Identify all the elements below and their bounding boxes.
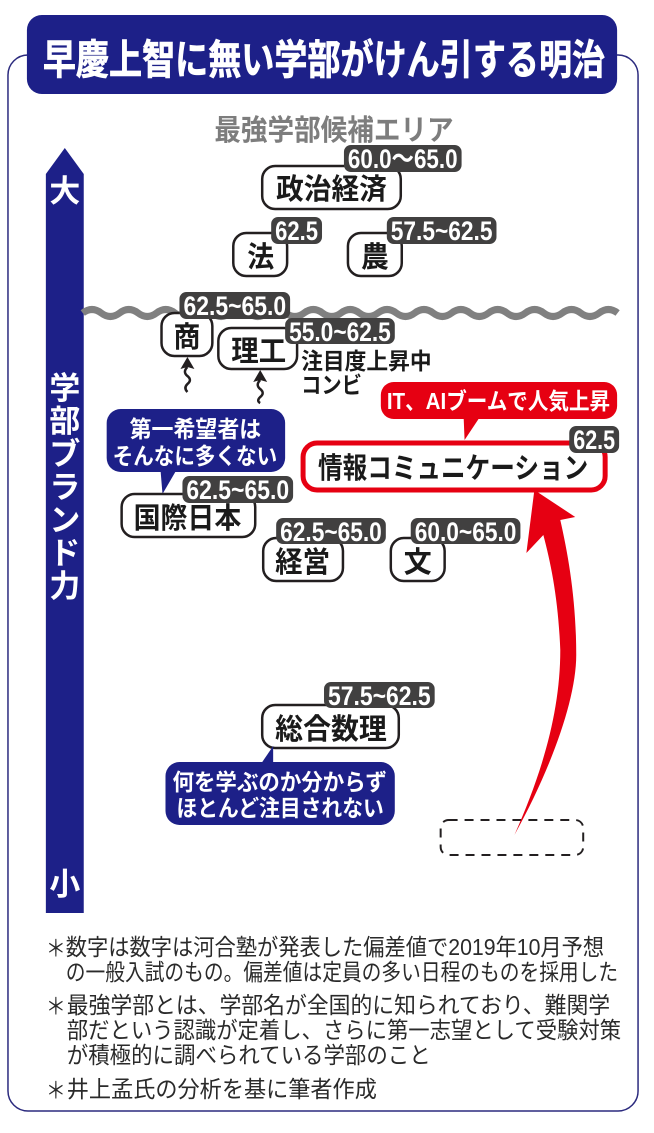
footnotes: ＊ — [46, 935, 66, 961]
footnotes: 最強学部とは、学部名が全国的に知られており、難関学 — [67, 992, 610, 1018]
faculty: letters: 60.0~65.0 — [415, 517, 516, 547]
annotation: rising attention pair — [301, 348, 432, 398]
faculty: commerce: 商 — [173, 322, 200, 354]
footnotes: ＊ — [46, 993, 66, 1019]
faculty: information communication: 情報コミュニケーション — [318, 453, 588, 485]
faculty: business administration: 62.5~65.0 — [280, 517, 382, 547]
footnotes — [46, 934, 621, 1103]
wavy boundary line — [83, 310, 618, 316]
callout: hardly noticed: ほとんど注目されない — [176, 795, 384, 821]
faculty: agriculture: 57.5~62.5 — [391, 216, 493, 246]
callout: few first-choice applicants: そんなに多くない — [113, 443, 277, 469]
faculty: business administration: 経営 — [275, 547, 330, 579]
callout: few first-choice applicants: 第一希望者は — [130, 416, 261, 442]
faculty: international japanese studies: 62.5~65.0 — [186, 475, 289, 505]
callout: hardly noticed: 何を学ぶのか分からず — [172, 769, 387, 795]
faculty: information communication: 62.5 — [573, 425, 615, 455]
axis arrow: faculty brand power: 小 — [49, 867, 80, 902]
faculty: general mathematical sciences: 57.5~62.5 — [328, 681, 431, 711]
faculty: letters — [391, 517, 520, 581]
footnotes: 数字は数字は河合塾が発表した偏差値で2019年10月予想 — [66, 934, 604, 960]
faculty: general mathematical sciences — [262, 681, 435, 748]
faculty: law: 法 — [247, 242, 274, 274]
faculty: commerce: 62.5~65.0 — [183, 291, 286, 321]
footnotes: ＊ — [46, 1077, 66, 1103]
footnotes: が積極的に調べられている学部のこと — [67, 1042, 431, 1068]
faculty: international japanese studies: 国際日本 — [134, 503, 241, 535]
dashed former position box — [441, 820, 583, 855]
faculty: business administration — [263, 517, 386, 581]
axis arrow: faculty brand power: 大 — [49, 174, 80, 209]
faculty: science and engineering: 55.0~62.5 — [289, 317, 391, 347]
heading: strongest faculty candidate area: 最強学部候補エリア — [214, 115, 454, 147]
callout: IT and AI boom: IT、AIブームで人気上昇 — [387, 388, 610, 414]
squiggle arrow: science and engineering — [253, 370, 267, 403]
red rising arrow — [514, 490, 576, 835]
faculty: law: 62.5 — [275, 216, 318, 246]
faculty: international japanese studies — [122, 475, 293, 537]
squiggle arrow: commerce — [180, 357, 194, 392]
faculty: politics and economics: 60.0〜65.0 — [348, 144, 458, 174]
footnotes: 井上孟氏の分析を基に筆者作成 — [67, 1076, 377, 1102]
axis arrow: faculty brand power: 学部ブランド力 — [49, 371, 80, 604]
axis arrow: faculty brand power — [46, 148, 84, 913]
faculty: agriculture: 農 — [361, 242, 389, 274]
faculty: information communication — [303, 425, 619, 490]
footnotes: 部だという認識が定着し、さらに第一志望として受験対策 — [67, 1017, 621, 1043]
faculty: politics and economics: 政治経済 — [276, 174, 387, 206]
faculty: agriculture — [348, 216, 496, 276]
faculty: commerce — [162, 291, 290, 356]
faculty: science and engineering: 理工 — [231, 336, 286, 368]
annotation: rising attention pair: 注目度上昇中 — [301, 348, 432, 374]
callout: few first-choice applicants — [107, 409, 285, 494]
faculty: letters: 文 — [404, 547, 432, 579]
annotation: rising attention pair: コンビ — [301, 372, 362, 398]
callout: hardly noticed — [165, 746, 395, 825]
title — [27, 15, 617, 94]
faculty: general mathematical sciences: 総合数理 — [275, 714, 387, 746]
callout: IT and AI boom — [381, 382, 617, 440]
faculty: law — [233, 216, 322, 276]
faculty: politics and economics — [262, 144, 462, 209]
faculty: science and engineering — [218, 317, 395, 369]
